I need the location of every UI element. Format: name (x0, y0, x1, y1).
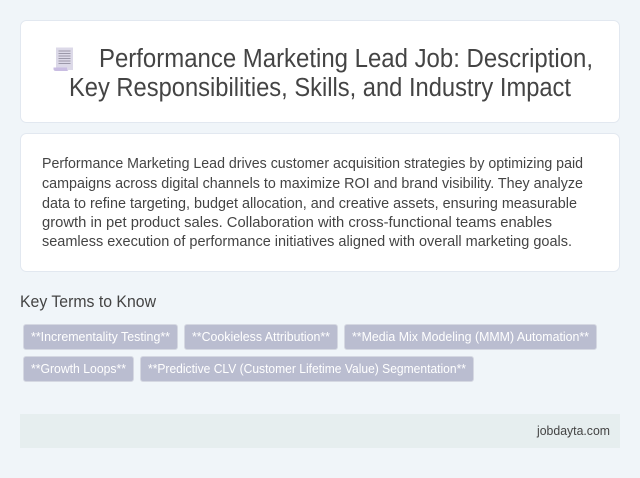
tag: incrementality testing: **Incrementality Testing** (31, 330, 170, 344)
description text (42, 156, 583, 250)
footer source text: jobdayta.com (536, 424, 610, 438)
tag: incrementality testing (24, 324, 178, 350)
description text: Performance Marketing Lead drives customer acquisition strategies by optimizing paid (42, 156, 583, 172)
tag: cookieless attribution: **Cookieless Attribution** (192, 330, 330, 344)
panel: description card (20, 134, 620, 272)
tag: growth loops: **Growth Loops** (31, 362, 126, 376)
heading line 2: Key Responsibilities, Skills, and Industry Impact (69, 74, 571, 102)
description text: campaigns across digital channels to maximize ROI and brand visibility. They analyze (42, 176, 583, 192)
tag: predictive clv: **Predictive CLV (Customer Lifetime Value) Segmentation** (148, 362, 466, 376)
icon: document scroll (54, 48, 73, 71)
heading: key terms: Key Terms to Know (20, 293, 156, 311)
description text: growth in pet product sales. Collaboration with cross-functional teams enables (42, 215, 552, 231)
tag: media mix modeling (344, 324, 596, 350)
description text: data to refine targeting, budget allocation, and creative assets, ensuring measurable (42, 196, 577, 212)
tag: growth loops (24, 356, 134, 382)
heading line 1: Performance Marketing Lead Job: Description, (99, 45, 593, 73)
panel: title card (20, 20, 620, 122)
description text: seamless execution of performance initiatives aligned with overall marketing goals. (42, 234, 572, 250)
tag: cookieless attribution (184, 324, 338, 350)
tag: predictive clv (140, 356, 474, 382)
footer (20, 414, 620, 448)
tag: media mix modeling: **Media Mix Modeling (MMM) Automation** (352, 330, 589, 344)
